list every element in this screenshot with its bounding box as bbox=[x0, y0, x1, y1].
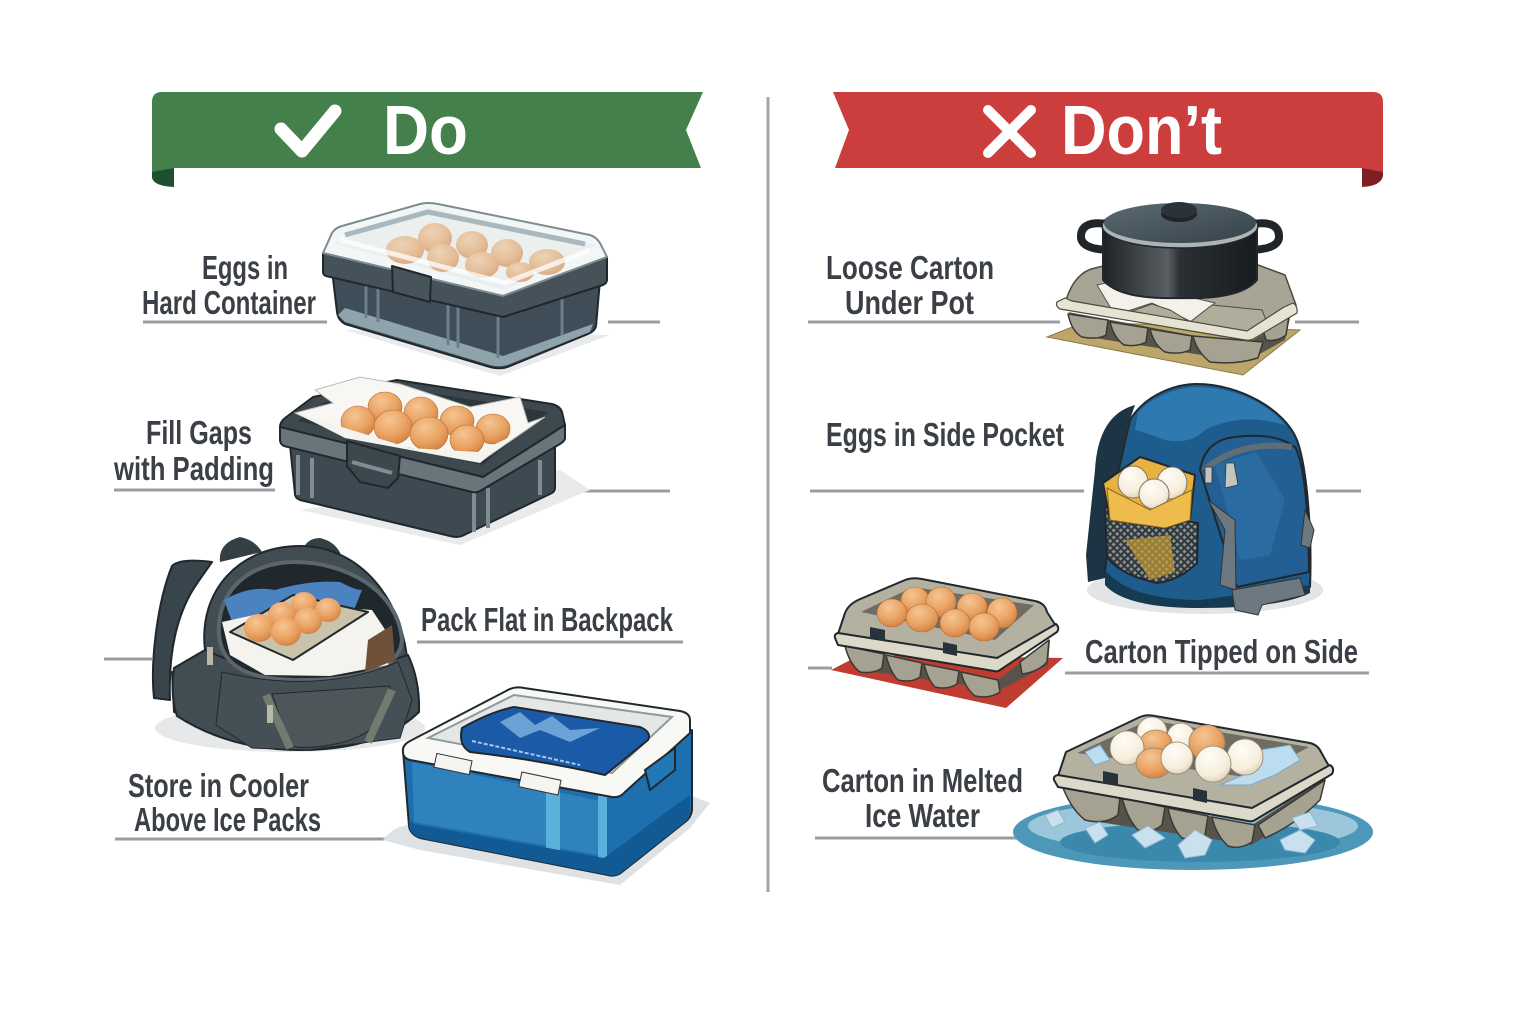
label: carton in melted ice water: Ice Water bbox=[865, 797, 980, 834]
label: loose carton under pot bbox=[826, 249, 994, 321]
label: carton tipped on side: Carton Tipped on Side bbox=[1085, 633, 1358, 670]
label: store in cooler above ice packs bbox=[128, 767, 321, 838]
item: eggs in side pocket bbox=[810, 384, 1361, 615]
banner: Do bbox=[152, 91, 703, 187]
label: pack flat in backpack: Pack Flat in Backpack bbox=[421, 601, 673, 638]
illustration: blue cooler with ice pack bbox=[383, 687, 710, 885]
item: store in cooler bbox=[115, 687, 710, 885]
label: fill gaps with padding: with Padding bbox=[113, 450, 274, 487]
illustration: clear-lid container with eggs bbox=[323, 203, 610, 376]
icon: check mark bbox=[281, 111, 335, 151]
label: carton in melted ice water: Carton in Melted bbox=[822, 762, 1023, 799]
label: store in cooler above ice packs: Above Ice Packs bbox=[134, 801, 321, 838]
illustration: blue backpack with egg basket bbox=[1086, 384, 1323, 615]
illustration: carton in melted ice puddle bbox=[1013, 715, 1373, 870]
item: eggs in hard container bbox=[142, 203, 660, 376]
panel: do list bbox=[104, 203, 710, 885]
label: eggs in side pocket: Eggs in Side Pocket bbox=[826, 416, 1064, 453]
label: store in cooler above ice packs: Store in Cooler bbox=[128, 767, 309, 804]
heading: Do: Do bbox=[383, 91, 468, 169]
label: fill gaps with padding bbox=[113, 414, 274, 487]
item: loose carton under pot bbox=[808, 202, 1359, 375]
panel: don't list bbox=[808, 202, 1373, 870]
centre divider bbox=[766, 97, 770, 892]
label: eggs in hard container: Eggs in bbox=[202, 249, 288, 286]
label: carton in melted ice water bbox=[822, 762, 1023, 834]
item: carton tipped on side bbox=[808, 578, 1369, 708]
illustration: egg carton on red mat bbox=[831, 578, 1063, 708]
label: eggs in hard container bbox=[142, 249, 316, 321]
label: loose carton under pot: Under Pot bbox=[845, 284, 974, 321]
item: carton in melted ice water bbox=[815, 715, 1373, 870]
item: fill gaps with padding bbox=[113, 377, 670, 545]
icon: cross mark bbox=[988, 110, 1031, 153]
item: pack flat in backpack bbox=[104, 537, 683, 752]
illustration: padded container with eggs bbox=[280, 377, 590, 545]
label: eggs in hard container: Hard Container bbox=[142, 284, 316, 321]
illustration: open grey backpack bbox=[153, 537, 425, 752]
banner: Don't bbox=[833, 91, 1383, 187]
heading: Don't: Don’t bbox=[1061, 91, 1222, 169]
label: fill gaps with padding: Fill Gaps bbox=[146, 414, 252, 451]
label: loose carton under pot: Loose Carton bbox=[826, 249, 994, 286]
illustration: pot crushing carton bbox=[1047, 202, 1300, 375]
